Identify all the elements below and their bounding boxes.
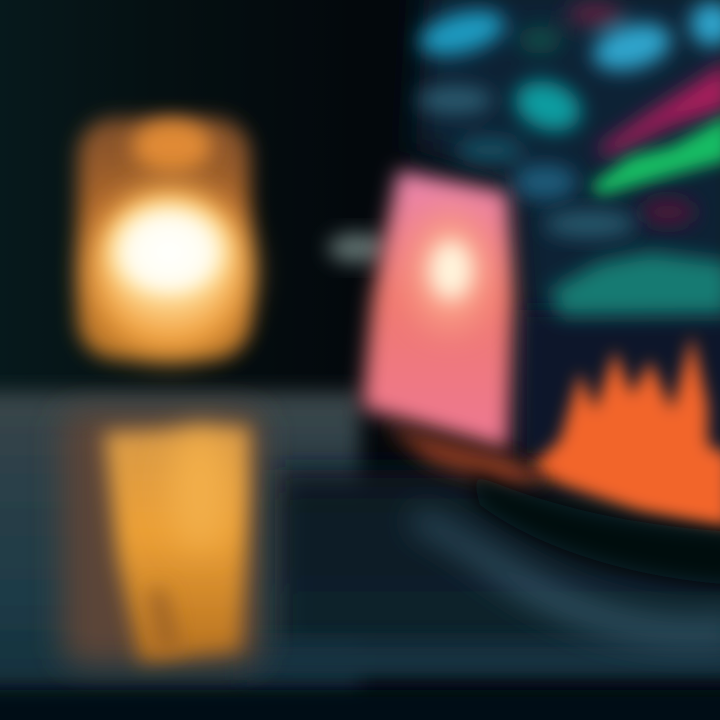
teal band	[550, 252, 720, 316]
desk surface	[0, 392, 720, 720]
jar halo	[90, 188, 250, 356]
jar reflection	[62, 410, 262, 665]
jar lid glow	[132, 120, 212, 172]
screen: dark chart panel	[414, 0, 720, 530]
blue data patches	[414, 2, 720, 200]
glowing jar	[78, 118, 250, 358]
magenta trend band	[596, 60, 720, 156]
dark red accent	[640, 198, 696, 226]
laptop curved edge	[410, 472, 720, 644]
green trend band	[590, 114, 720, 196]
pink phone	[362, 170, 514, 450]
orange area chart	[530, 335, 720, 530]
faint connector glow	[328, 233, 388, 263]
jar bright core	[101, 196, 237, 308]
red glow under phone	[385, 425, 550, 486]
